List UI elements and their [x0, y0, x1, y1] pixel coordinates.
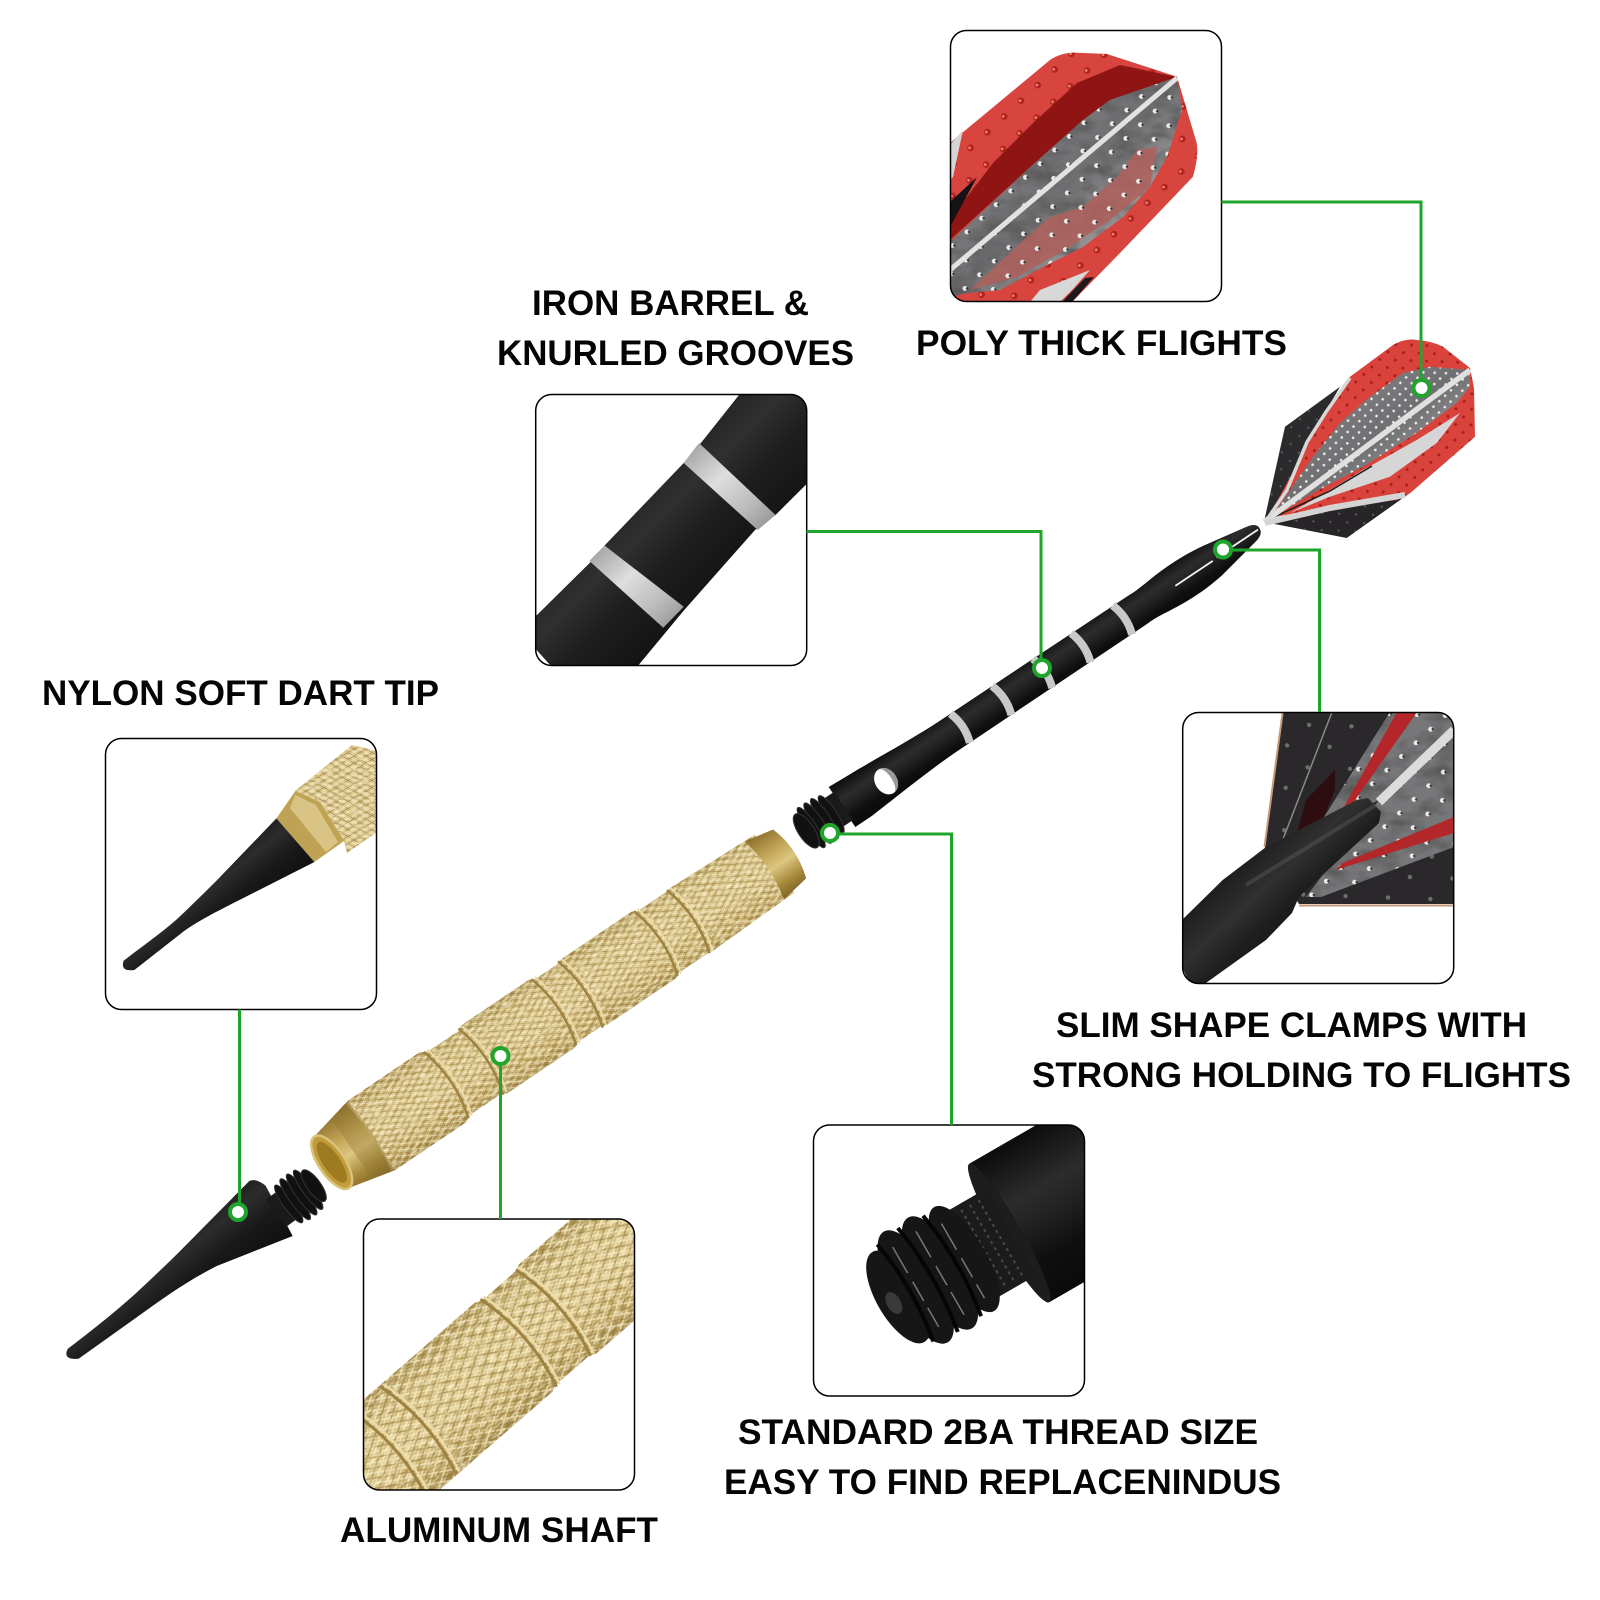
ridges [866, 1206, 1000, 1344]
main dart: aluminum shaft [786, 508, 1273, 855]
panel: poly thick flights close-up [950, 30, 1222, 302]
silver ring lower [589, 546, 684, 628]
silver rings [950, 604, 1135, 743]
panel: standard 2BA thread close-up [812, 1124, 1086, 1397]
connector: tip [230, 1010, 246, 1220]
main dart: flight [1264, 340, 1475, 538]
heading: iron barrel [497, 284, 854, 373]
heading: clamp: SLIM SHAPE CLAMPS WITH [1056, 1006, 1527, 1045]
hole [869, 763, 903, 799]
heading: shaft: ALUMINUM SHAFT [340, 1511, 658, 1550]
hex socket [885, 1292, 902, 1314]
neck [950, 1194, 1026, 1296]
heading: flights: POLY THICK FLIGHTS [916, 324, 1287, 363]
heading: clamp: STRONG HOLDING TO FLIGHTS [1032, 1056, 1571, 1095]
connector: barrel [806, 532, 1050, 676]
heading: thread: STANDARD 2BA THREAD SIZE [738, 1413, 1258, 1452]
panel: iron barrel and knurled grooves close-up [536, 394, 807, 666]
thread [786, 786, 857, 855]
heading: clamp [1032, 1006, 1571, 1095]
main dart: nylon tip [66, 1161, 334, 1359]
heading: thread: EASY TO FIND REPLACENINDUS [724, 1463, 1281, 1502]
panel: slim shape clamps close-up [1182, 712, 1454, 984]
connector: shaft [492, 1048, 508, 1219]
heading: iron barrel: KNURLED GROOVES [497, 334, 854, 373]
tip thread [261, 1161, 334, 1234]
panel: aluminum shaft knurl close-up [362, 1218, 636, 1491]
connector: flights [1222, 202, 1430, 396]
heading: iron barrel: IRON BARREL & [532, 284, 809, 323]
panel: nylon soft dart tip close-up [106, 738, 377, 1010]
silver ring upper [684, 443, 776, 530]
thread body [969, 1126, 1084, 1302]
connector: thread [822, 825, 952, 1125]
slot [1175, 530, 1259, 586]
main dart: brass barrel [297, 816, 817, 1204]
heading: tip: NYLON SOFT DART TIP [42, 674, 439, 713]
connector: clamp [1215, 542, 1320, 712]
heading: thread [724, 1413, 1281, 1502]
